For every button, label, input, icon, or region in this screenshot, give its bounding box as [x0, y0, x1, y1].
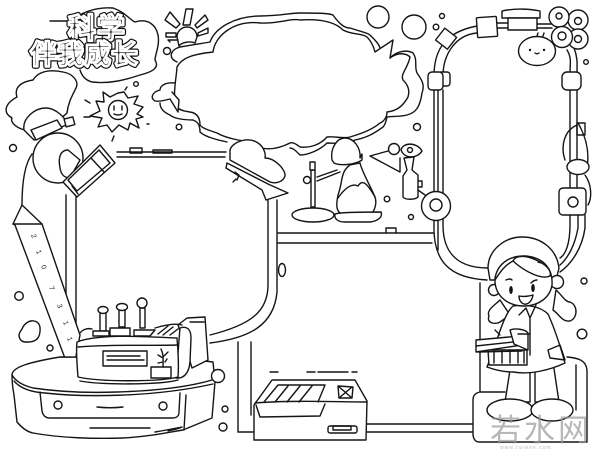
- potted plant: [151, 349, 171, 378]
- ruler: [13, 205, 80, 377]
- girl hood: [488, 237, 559, 280]
- girl eyes: [509, 284, 535, 294]
- ruler marks: 2: [29, 233, 37, 239]
- ring cluster: [549, 7, 588, 49]
- machine strap: [176, 327, 191, 378]
- title: 伴我成长: 伴我成长: [30, 40, 138, 70]
- tube top box: [476, 16, 498, 38]
- burner lid cloud: [230, 140, 285, 183]
- ring wheel: [422, 192, 450, 220]
- panel: centre lower frame: [238, 228, 480, 432]
- girl book and clipboard: [476, 329, 530, 365]
- girl scientist: [473, 237, 587, 442]
- dropper tool: [370, 144, 450, 220]
- title: 伴我成长: 伴我成长: [30, 40, 138, 70]
- title: 科学: 科学: [68, 13, 126, 44]
- burner arm: [226, 163, 288, 200]
- girl legs: [505, 362, 559, 402]
- cloud left clip: [152, 83, 179, 112]
- girl hair curls: [488, 290, 576, 323]
- panel: right tube frame: [428, 7, 591, 280]
- icon: microscope: [6, 71, 115, 205]
- ruler: 1: [65, 336, 73, 342]
- microscope globe: [33, 133, 83, 183]
- panel: left frame: [66, 148, 277, 343]
- machine knobs: [80, 298, 182, 336]
- ruler: 1: [61, 320, 69, 326]
- drawer: [40, 392, 186, 432]
- girl ears: [488, 276, 564, 296]
- eyepiece collar: [59, 150, 80, 178]
- watermark: 若水网: [490, 413, 592, 448]
- girl fringe: [513, 256, 550, 277]
- smiling face bubble: [518, 33, 556, 66]
- box handle: [328, 426, 357, 433]
- box tray: [256, 404, 325, 417]
- ruler: 1: [34, 249, 42, 255]
- top connector: [497, 9, 552, 30]
- icon: smiling sun: [84, 87, 149, 141]
- tube tilted square: [436, 28, 457, 49]
- ruler: 3: [55, 303, 63, 309]
- alcohol lamp flask: [292, 138, 381, 222]
- storage box: [254, 372, 367, 440]
- panel: centre thought cloud: [152, 13, 423, 155]
- title cloud: [30, 8, 158, 83]
- girl coat: [487, 305, 565, 373]
- tube coupler right: [562, 72, 581, 90]
- right side clamp: [559, 123, 591, 215]
- title: 科学: 科学: [68, 13, 126, 44]
- icon: small sun at top: [165, 9, 208, 46]
- lamp clamp stand: [292, 162, 340, 222]
- lab machine: [77, 298, 208, 384]
- heart: [19, 321, 40, 342]
- machine body: [77, 336, 178, 381]
- ruler: 0: [39, 264, 47, 270]
- microscope band: [31, 120, 62, 140]
- microscope lamp cloud: [6, 71, 77, 130]
- table knob: [212, 370, 224, 382]
- table with drawer: [12, 357, 224, 438]
- girl background block: [473, 357, 587, 442]
- microscope hood: [24, 108, 68, 140]
- machine label plate: [103, 351, 147, 366]
- box stripes: [264, 385, 325, 402]
- machine side block: [178, 317, 208, 368]
- girl face: [495, 256, 552, 306]
- tube coupler left: [428, 72, 450, 90]
- box stamp: [338, 386, 353, 398]
- eyepiece: [63, 145, 115, 197]
- alcohol burner stand: [226, 140, 288, 200]
- girl shoes: [487, 399, 573, 421]
- girl mouth: [519, 295, 533, 304]
- ruler: 7: [47, 285, 55, 291]
